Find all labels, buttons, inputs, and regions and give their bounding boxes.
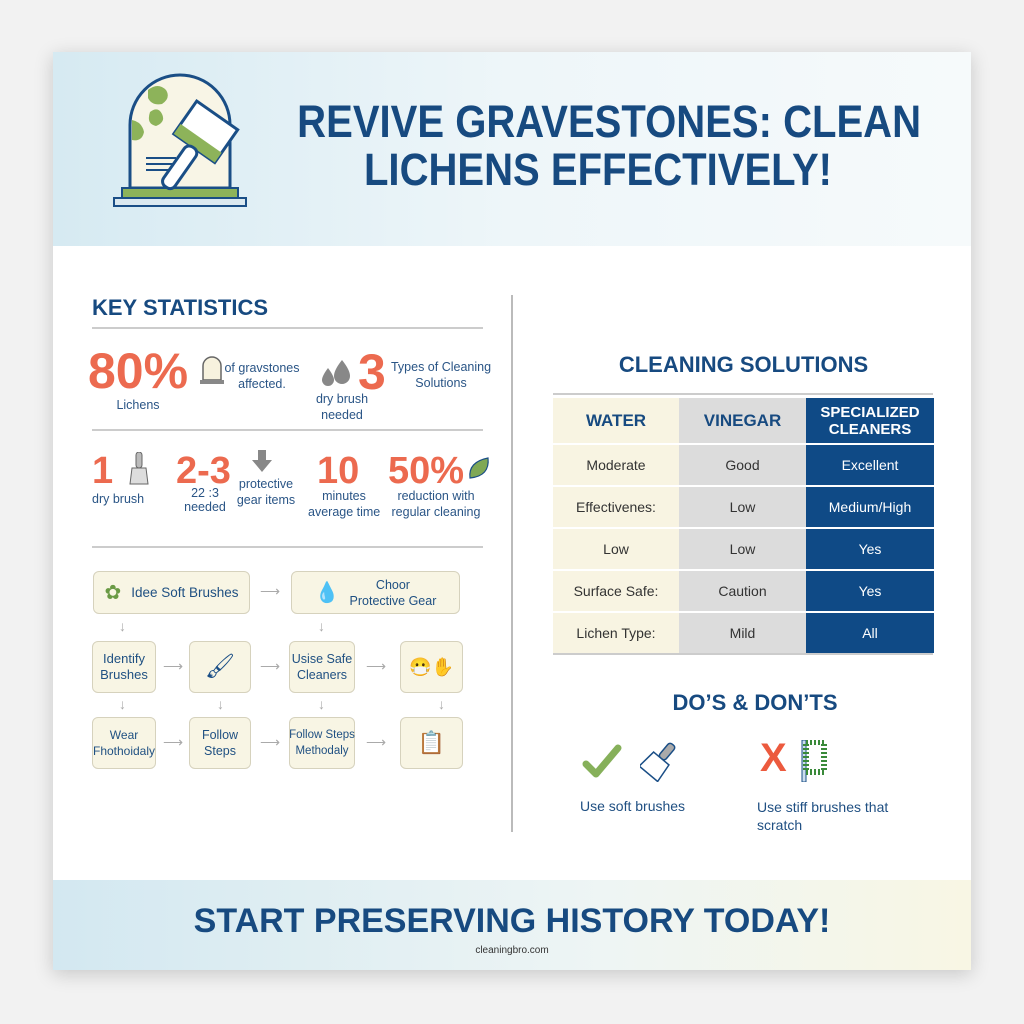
icon: X: X [760,736,787,780]
icon: gravestone small [200,356,224,384]
table: cleaning solutions: Low [603,541,629,557]
flowchart: Idee Soft Brushes [131,584,239,600]
flowchart: ↓ [318,696,325,712]
flowchart: Usise Safe [292,652,352,666]
flowchart: ⟶ [260,734,280,750]
panel: key statistics: 50% [388,450,464,492]
table: cleaning solutions: Yes [859,541,881,557]
icon: check [582,744,622,778]
text: dont: scratch [757,817,802,833]
flowchart: ↓ [217,696,224,712]
flowchart: Methodaly [295,745,349,757]
text: of gravstones affected [224,361,300,391]
panel: key statistics: needed [184,500,226,514]
flowchart: ↓ [438,696,445,712]
row 2 stats: 1 [92,450,113,492]
flowchart [92,571,463,769]
panel: key statistics: regular cleaning [392,505,480,519]
flowchart: Choor [376,578,410,592]
flowchart: ✿ [104,582,121,604]
flowchart: ⟶ [260,658,280,674]
text: dont: Use stiff brushes that [757,799,888,815]
divider vertical [511,295,512,832]
flowchart: ↓ [119,696,126,712]
panel: key statistics: needed [321,408,363,422]
table: cleaning solutions: VINEGAR [704,410,781,430]
icon: stiff brush [802,740,827,782]
flowchart: 😷✋ [409,657,454,677]
flowchart: Follow [202,728,238,742]
flowchart: Cleaners [297,668,347,682]
flowchart: Protective Gear [350,594,436,608]
table: cleaning solutions: All [862,625,878,641]
flowchart: Fhothoidaly [93,744,155,758]
flowchart: 📋 [418,730,445,755]
title: LICHENS EFFECTIVELY! [364,144,832,195]
text: of gravstones affected: affected. [238,377,286,391]
table: cleaning solutions: Mild [730,625,755,641]
panel: key statistics [88,295,491,548]
table: cleaning solutions: Caution [718,583,767,599]
stat: 80%: 80% [88,343,188,399]
flowchart: ⟶ [366,734,386,750]
heading: dos and donts: DO’S & DON’TS [672,690,838,715]
table: cleaning solutions [553,398,934,653]
table: cleaning solutions: SPECIALIZED [820,404,920,420]
text: do: Use soft brushes [580,798,685,814]
title [297,96,921,195]
table: cleaning solutions: Low [730,541,755,557]
flowchart: Steps [204,744,236,758]
table: cleaning solutions: Moderate [586,457,646,473]
flowchart: ↓ [318,618,325,634]
panel: key statistics: 22 :3 [191,486,219,500]
heading: cleaning solutions: CLEANING SOLUTIONS [619,352,868,377]
flowchart: Brushes [100,667,148,682]
panel: key statistics: dry brush [316,392,368,406]
panel: key statistics: dry brush [92,492,144,506]
heading: key statistics: KEY STATISTICS [92,295,268,320]
table: cleaning solutions: Surface Safe: [574,583,658,599]
stat: 3: 3 [358,344,386,400]
credit: cleaningbro.com [475,945,549,956]
text: of gravstones affected: of gravstones [224,361,300,375]
flowchart: 🖌 [205,653,235,680]
flowchart: ⟶ [163,734,183,750]
table: cleaning solutions: Effectivenes: [576,499,656,515]
footer text: START PRESERVING HISTORY TODAY! [194,902,830,940]
table: cleaning solutions: Low [730,499,755,515]
table: cleaning solutions: WATER [586,410,646,430]
panel: key statistics: 10 [317,450,359,492]
flowchart: Identify [103,651,145,666]
text: dont [757,799,888,833]
flowchart: ↓ [119,618,126,634]
panel: key statistics: minutes [322,489,366,503]
table: cleaning solutions: CLEANERS [829,420,911,438]
panel: key statistics: average time [308,505,380,519]
title: REVIVE GRAVESTONES: CLEAN [297,96,921,147]
panel: key statistics: gear items [237,493,295,507]
flowchart: Follow Steps [289,729,355,741]
table: cleaning solutions: Yes [859,583,881,599]
icon: soft brush [640,742,676,782]
flowchart: Wear [110,728,138,742]
flowchart: ⟶ [366,658,386,674]
panel: key statistics: Types of Cleaning [391,360,491,374]
panel: key statistics: Solutions [415,376,467,390]
stat: 80%: Lichens [116,398,160,412]
header band [53,52,971,246]
flowchart: ⟶ [163,658,183,674]
table: cleaning solutions: Medium/High [829,499,911,515]
panel: key statistics: reduction with [397,489,475,503]
panel: key statistics: protective [239,477,293,491]
footer [53,880,971,970]
table: cleaning solutions: Lichen Type: [576,625,656,641]
flowchart: 💧 [315,582,340,604]
icon: drops [322,360,350,386]
icon: gravestone with brush [113,74,247,207]
table: cleaning solutions: Good [725,457,760,473]
panel: key statistics: 2-3 [176,450,231,492]
flowchart: ⟶ [260,583,280,599]
table: cleaning solutions: Excellent [842,457,898,473]
